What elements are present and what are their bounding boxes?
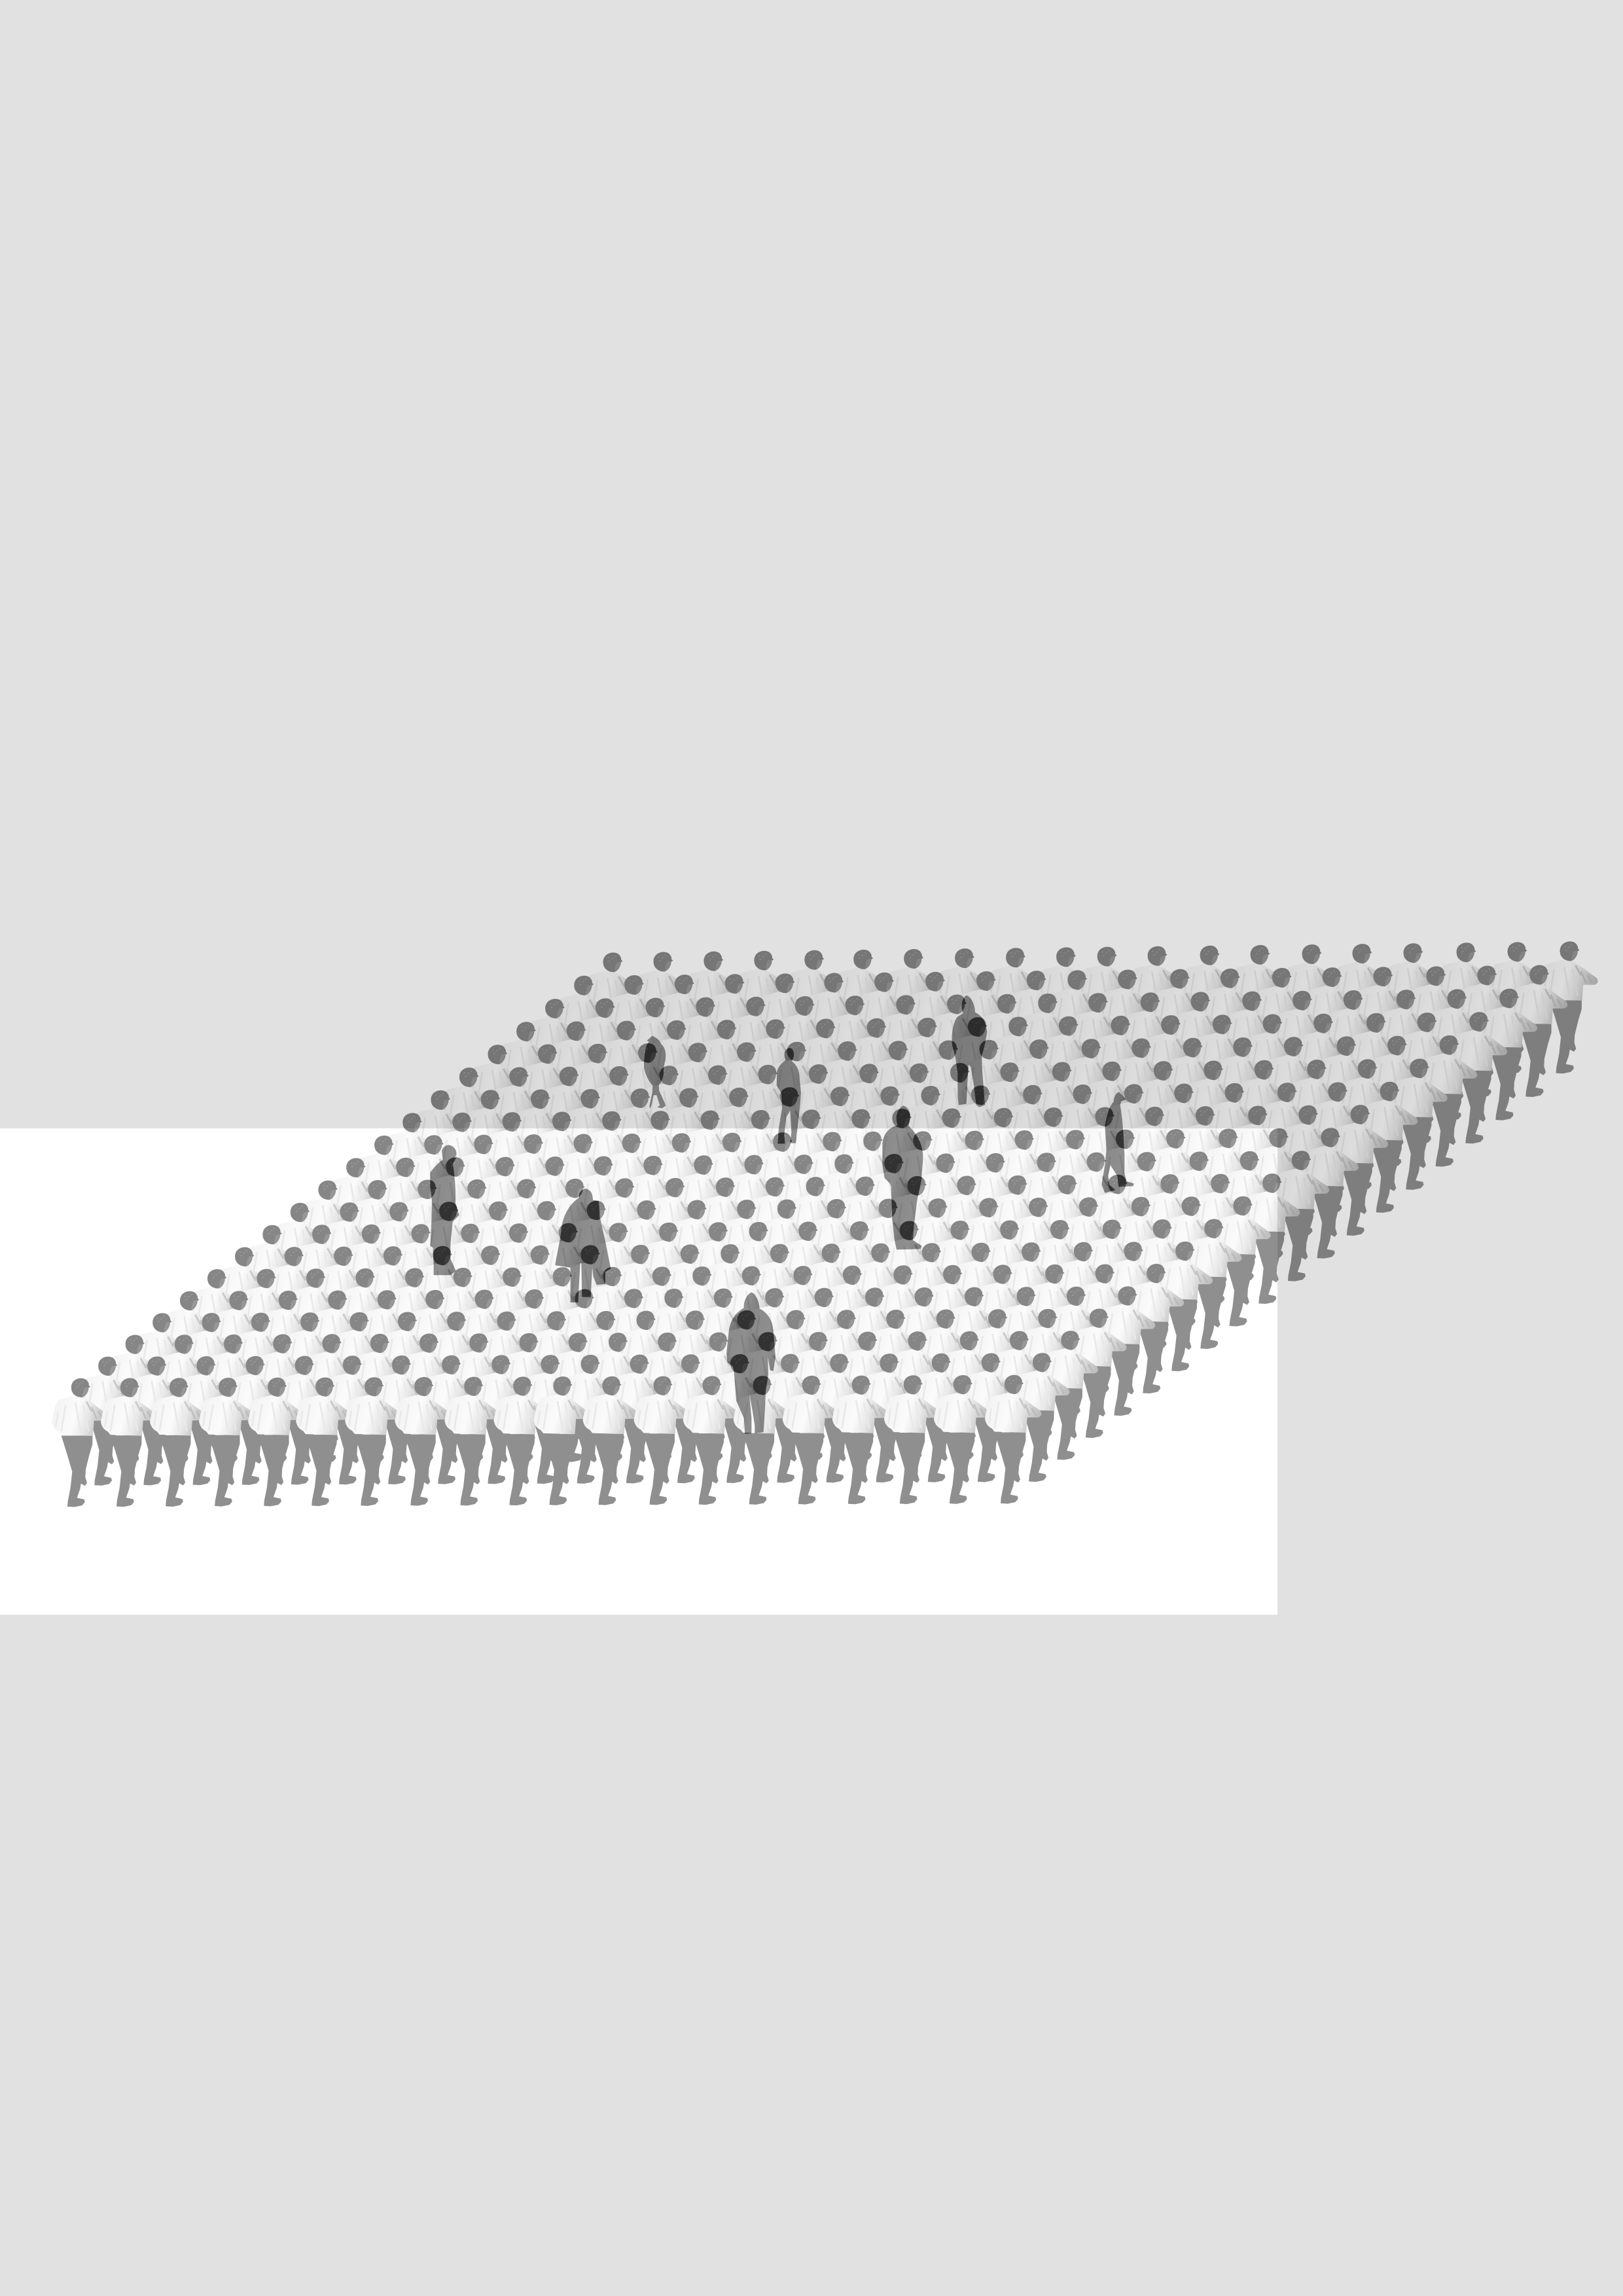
dark figure: hooded person, top centre (952, 996, 987, 1107)
crowd row 9 (271, 1196, 1271, 1333)
crowd row 2 (79, 1353, 1070, 1486)
crowd row 12 (355, 1128, 1359, 1266)
dark figure: side-facing person, left (430, 1145, 459, 1275)
crowd row 5 (160, 1286, 1155, 1421)
crowd row 3 (106, 1331, 1098, 1464)
crowd row 4 (133, 1308, 1126, 1443)
crowd row 18 (526, 988, 1537, 1131)
dark figure: hooded walker, lower centre (726, 1292, 776, 1434)
crowd row 6 (188, 1264, 1184, 1399)
dark figure: small walker, upper left (644, 1036, 666, 1109)
crowd row 10 (298, 1174, 1300, 1311)
crowd row 17 (497, 1012, 1507, 1154)
crowd row 1 (front) (52, 1375, 1041, 1507)
crowd row 14 (411, 1081, 1418, 1221)
crowd row 7 (215, 1242, 1213, 1377)
dark figure: large standing person, centre (882, 1105, 923, 1249)
crowd row 15 (439, 1058, 1448, 1199)
crowd row 13 (383, 1105, 1388, 1244)
crowd row 8 (243, 1219, 1241, 1355)
dark figure: person standing, upper middle (777, 1048, 801, 1143)
dark figure: walker with cap, right (1101, 1092, 1134, 1193)
crowd row 20 (back) (583, 941, 1598, 1085)
crowd formation: twenty rows of twenty identical figures (52, 941, 1598, 1507)
crowd row 16 (468, 1035, 1477, 1176)
crowd row 19 (554, 965, 1567, 1108)
dark figure: person in coat with bag, left centre (555, 1189, 611, 1302)
crowd row 11 (327, 1151, 1329, 1289)
